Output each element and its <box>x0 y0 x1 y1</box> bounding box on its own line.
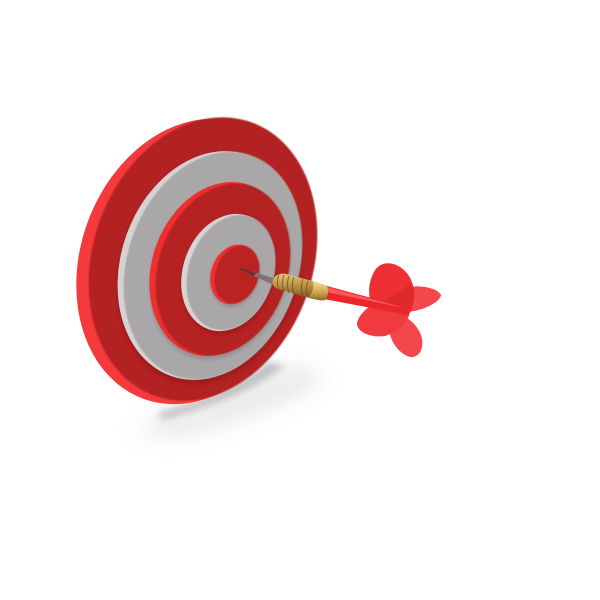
flight: upper <box>369 263 414 312</box>
shaft <box>324 286 412 315</box>
board edge <box>38 86 348 437</box>
ground shadow <box>130 362 325 436</box>
second red ring <box>127 163 313 375</box>
outer grey ring <box>88 126 332 405</box>
bullseye <box>202 238 267 311</box>
inner grey ring shadow <box>166 203 292 347</box>
barrel <box>272 274 328 300</box>
bullseye shadow <box>202 240 268 314</box>
flight: lower right <box>389 314 422 357</box>
dart <box>238 263 441 357</box>
board face <box>51 86 355 432</box>
flight: right <box>408 286 441 312</box>
flight: lower left <box>357 298 410 336</box>
needle <box>238 268 276 285</box>
barrel grooves <box>278 274 308 297</box>
second red ring shadow <box>126 165 314 379</box>
inner grey ring <box>166 201 290 344</box>
outer grey ring shadow <box>87 128 333 410</box>
target board <box>38 86 355 437</box>
